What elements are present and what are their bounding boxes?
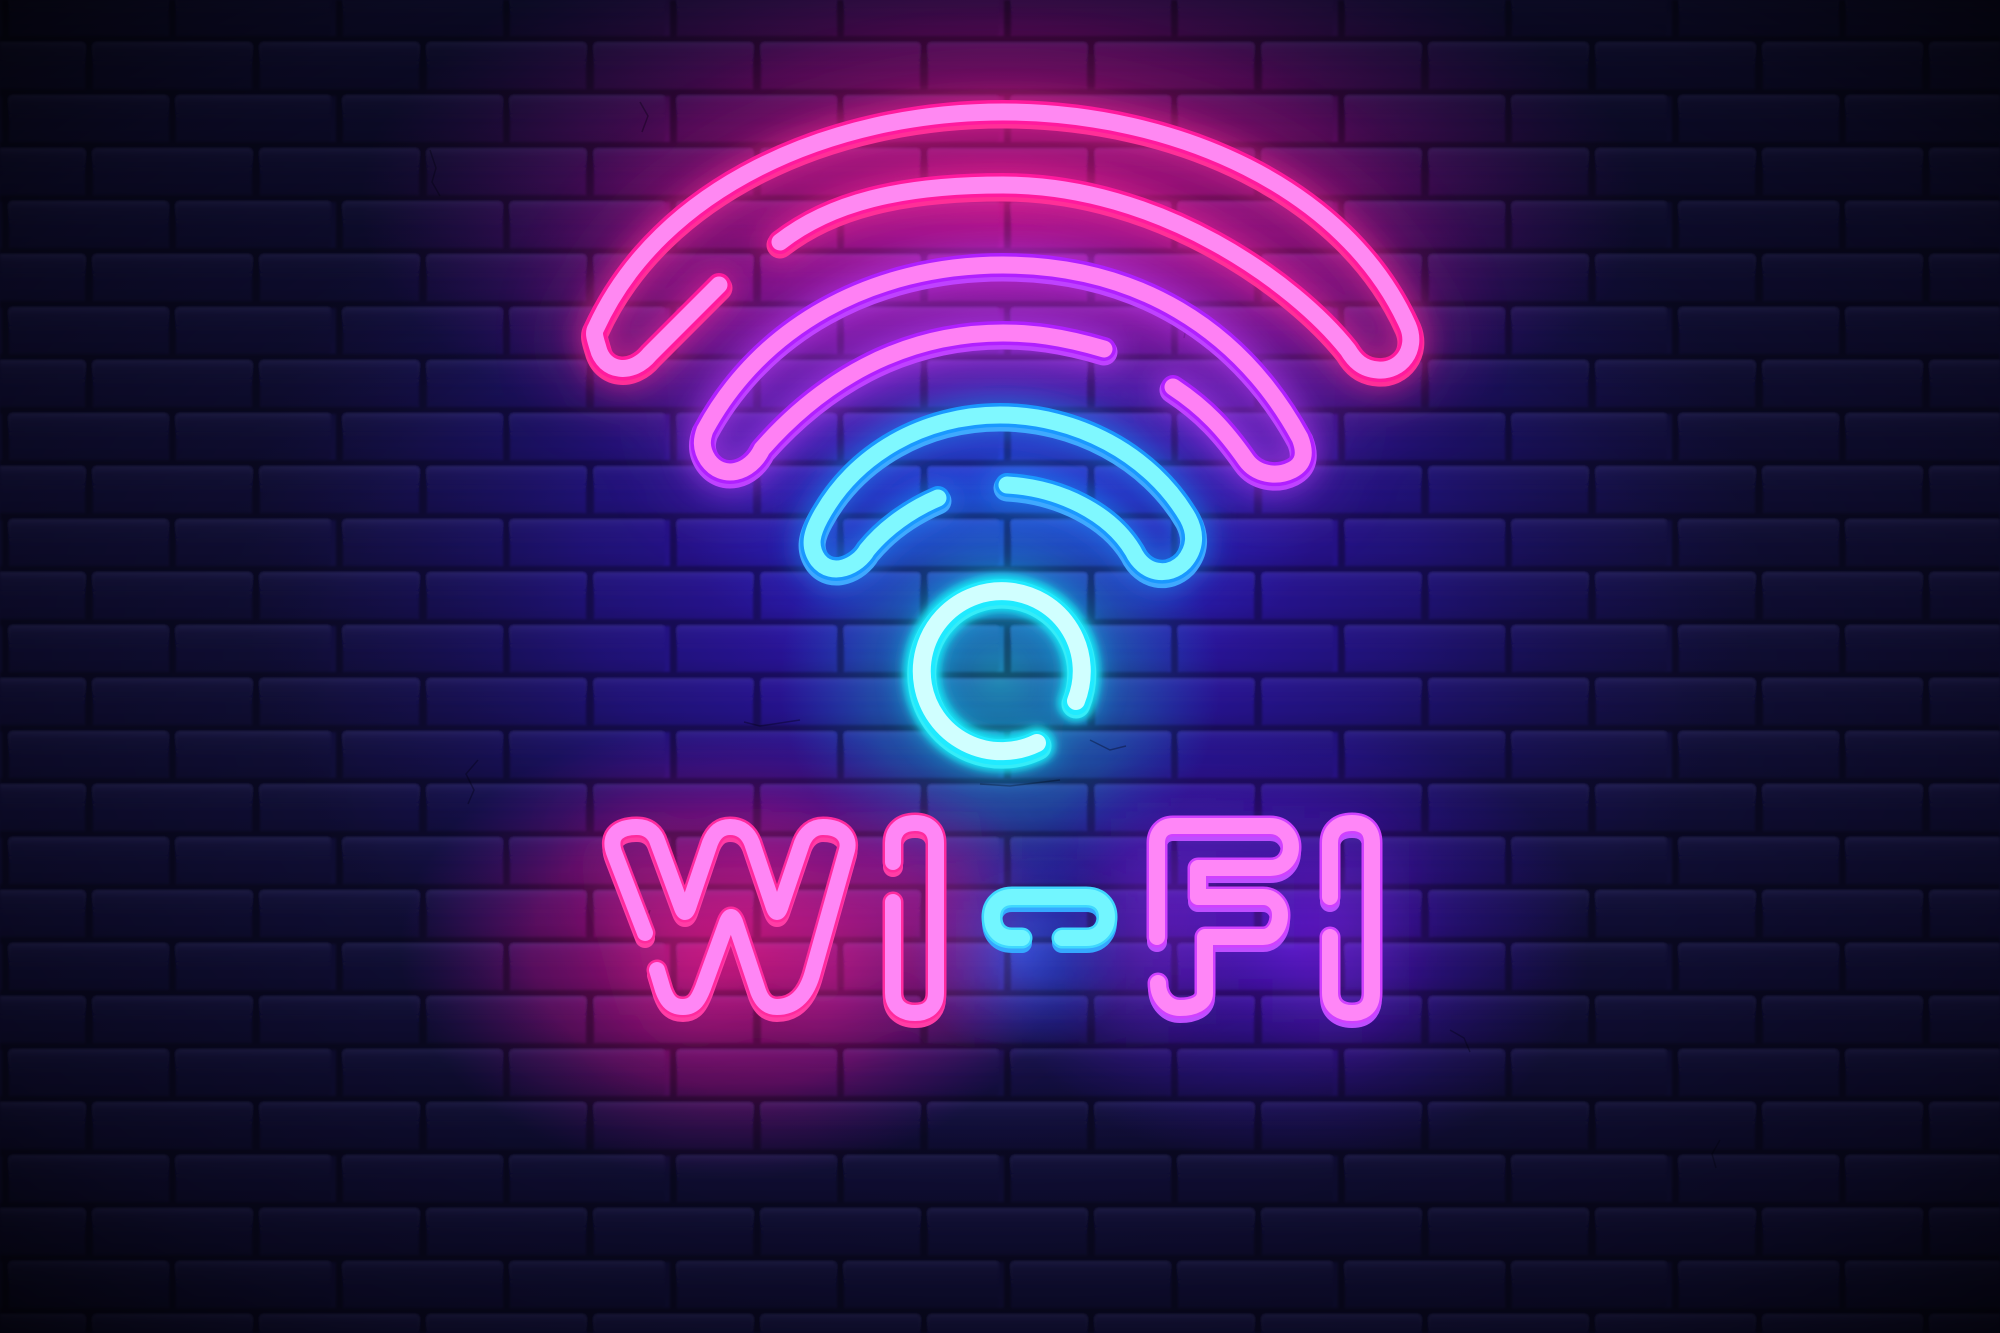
wide glow around the arcs xyxy=(595,114,1411,476)
arc: middle purple xyxy=(702,265,1303,477)
wifi signal arcs xyxy=(595,112,1411,754)
arc: outer pink xyxy=(595,112,1411,373)
arc: inner blue xyxy=(812,415,1194,575)
title text: WI-FI (soft glow beneath the tube lettering): WI -FI xyxy=(610,785,1385,1070)
tube: hyphen xyxy=(992,897,1107,943)
neon tube lettering xyxy=(612,823,1372,1018)
tube: I xyxy=(893,823,936,1018)
tube: F xyxy=(1157,826,1291,1013)
signal dot ring xyxy=(922,591,1082,754)
outer glow halos xyxy=(595,114,1411,753)
tube: W xyxy=(612,827,848,1012)
tube: second I xyxy=(1330,823,1372,1018)
